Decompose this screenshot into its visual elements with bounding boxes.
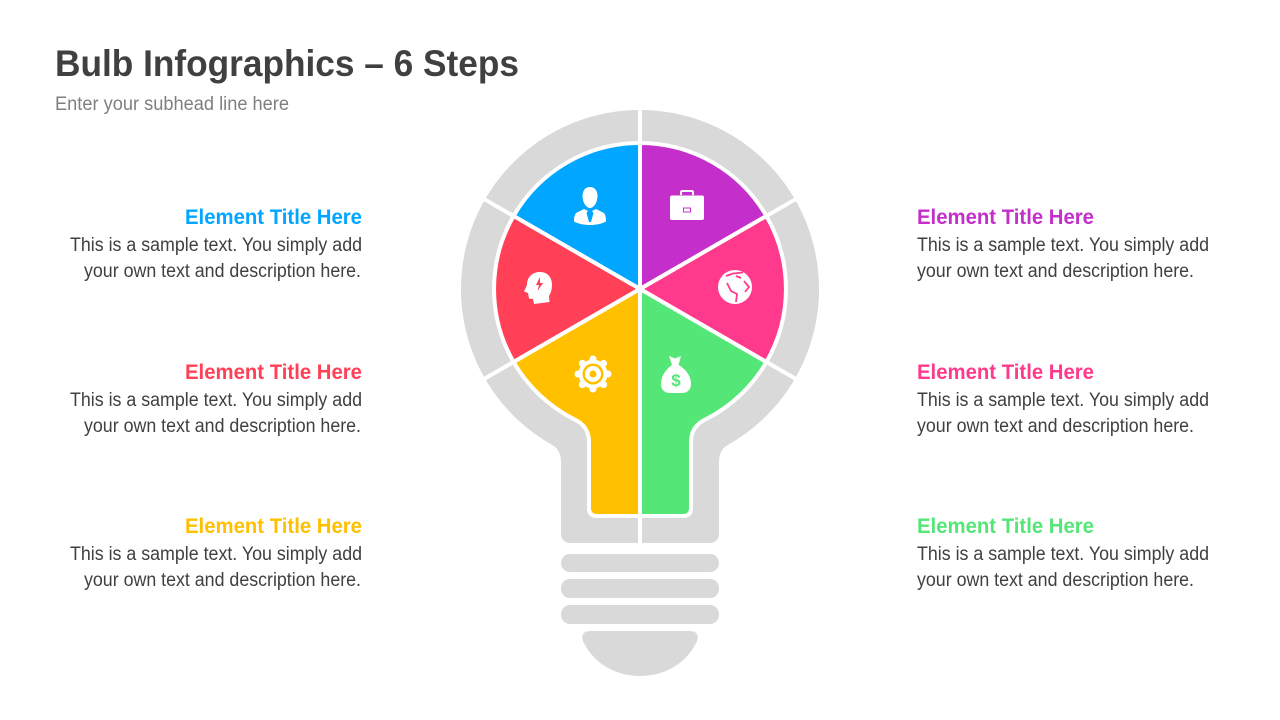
icon: businessman: [574, 187, 606, 225]
text block: blue step: [70, 206, 362, 282]
text block: red step: [70, 361, 362, 437]
bulb screw thread 2: [561, 579, 719, 598]
text block: pink step: Element Title Here: [917, 361, 1094, 384]
icon: briefcase: [670, 191, 704, 220]
text block: blue step: your own text and description here.: [84, 261, 361, 282]
segment: purple: [640, 143, 766, 289]
text block: pink step: [917, 361, 1209, 437]
segment: pink: [640, 216, 786, 362]
segment: green: [640, 289, 766, 516]
icon: gear: [574, 356, 612, 392]
text block: green step: your own text and description here.: [917, 570, 1194, 591]
text block: purple step: Element Title Here: [917, 206, 1094, 229]
text block: yellow step: [70, 515, 362, 591]
text block: blue step: This is a sample text. You simply add: [70, 235, 362, 256]
segment: red: [494, 216, 640, 362]
text block: red step: Element Title Here: [185, 361, 362, 384]
segment: yellow: [514, 289, 640, 516]
text block: green step: Element Title Here: [917, 515, 1094, 538]
bulb glass outline: [461, 110, 819, 543]
bulb screw thread 1: [561, 554, 719, 572]
icon: head with lightning bolt: [524, 272, 552, 304]
text block: green step: This is a sample text. You simply add: [917, 544, 1209, 565]
icon: globe: [718, 270, 752, 304]
text block: green step: [917, 515, 1209, 591]
bulb screw thread 3: [561, 605, 719, 624]
text block: red step: This is a sample text. You simply add: [70, 390, 362, 411]
text block: pink step: This is a sample text. You simply add: [917, 390, 1209, 411]
icon: money bag: $: [671, 371, 681, 390]
text block: purple step: This is a sample text. You simply add: [917, 235, 1209, 256]
icon: money bag: [661, 356, 691, 393]
text block: yellow step: This is a sample text. You simply add: [70, 544, 362, 565]
bulb base cap: [582, 631, 698, 676]
text block: pink step: your own text and description here.: [917, 416, 1194, 437]
title: Bulb Infographics – 6 Steps: [55, 43, 519, 84]
subtitle: Enter your subhead line here: [55, 94, 289, 115]
text block: red step: your own text and description here.: [84, 416, 361, 437]
text block: purple step: [917, 206, 1209, 282]
text block: yellow step: Element Title Here: [185, 515, 362, 538]
text block: yellow step: your own text and description here.: [84, 570, 361, 591]
text block: blue step: Element Title Here: [185, 206, 362, 229]
text block: purple step: your own text and description here.: [917, 261, 1194, 282]
segment: blue: [514, 143, 640, 289]
